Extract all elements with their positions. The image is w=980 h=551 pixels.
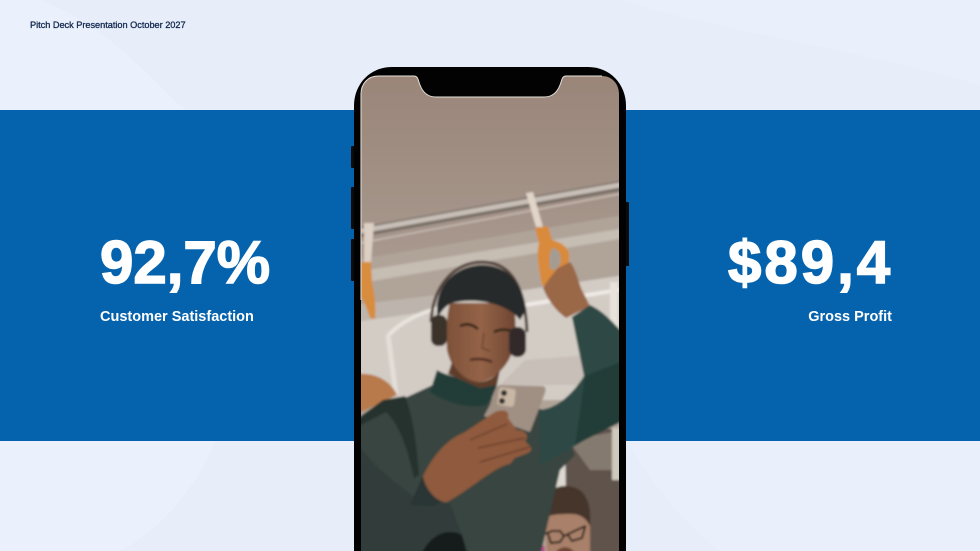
sweater body <box>355 375 575 551</box>
raised hand <box>543 262 590 318</box>
screen edge highlight <box>361 76 602 300</box>
blue band <box>0 110 980 441</box>
label: gross profit: Gross Profit <box>808 309 892 325</box>
left statistic: customer satisfaction <box>100 229 270 325</box>
value: $89,4: $89,4 <box>728 229 893 296</box>
hand holding phone <box>423 410 531 502</box>
overhead rail <box>355 184 625 244</box>
man wearing glasses <box>537 486 590 551</box>
neck and face <box>447 303 515 382</box>
right statistic: gross profit <box>728 229 893 325</box>
phone side buttons <box>351 146 629 281</box>
left strap and handle <box>364 223 374 262</box>
background passenger hair <box>361 372 398 414</box>
header text: Pitch Deck Presentation October 2027 <box>30 20 186 30</box>
lower sleeve <box>355 440 470 551</box>
headband and headphones <box>431 262 527 332</box>
train ceiling <box>362 76 619 260</box>
black beanie <box>437 265 526 320</box>
value: 92,7%: 92,7% <box>100 229 270 296</box>
turtleneck collar <box>430 370 497 406</box>
backpack strap <box>355 396 419 478</box>
phone body <box>354 67 626 551</box>
raised sleeve <box>540 305 625 465</box>
label: customer satisfaction: Customer Satisfaction <box>100 309 254 325</box>
phone mockup with photo <box>351 67 629 551</box>
dark window <box>565 428 625 551</box>
held smartphone <box>484 385 546 432</box>
train interior <box>355 215 625 551</box>
photo on screen <box>355 70 625 551</box>
right strap and handle <box>526 192 543 227</box>
